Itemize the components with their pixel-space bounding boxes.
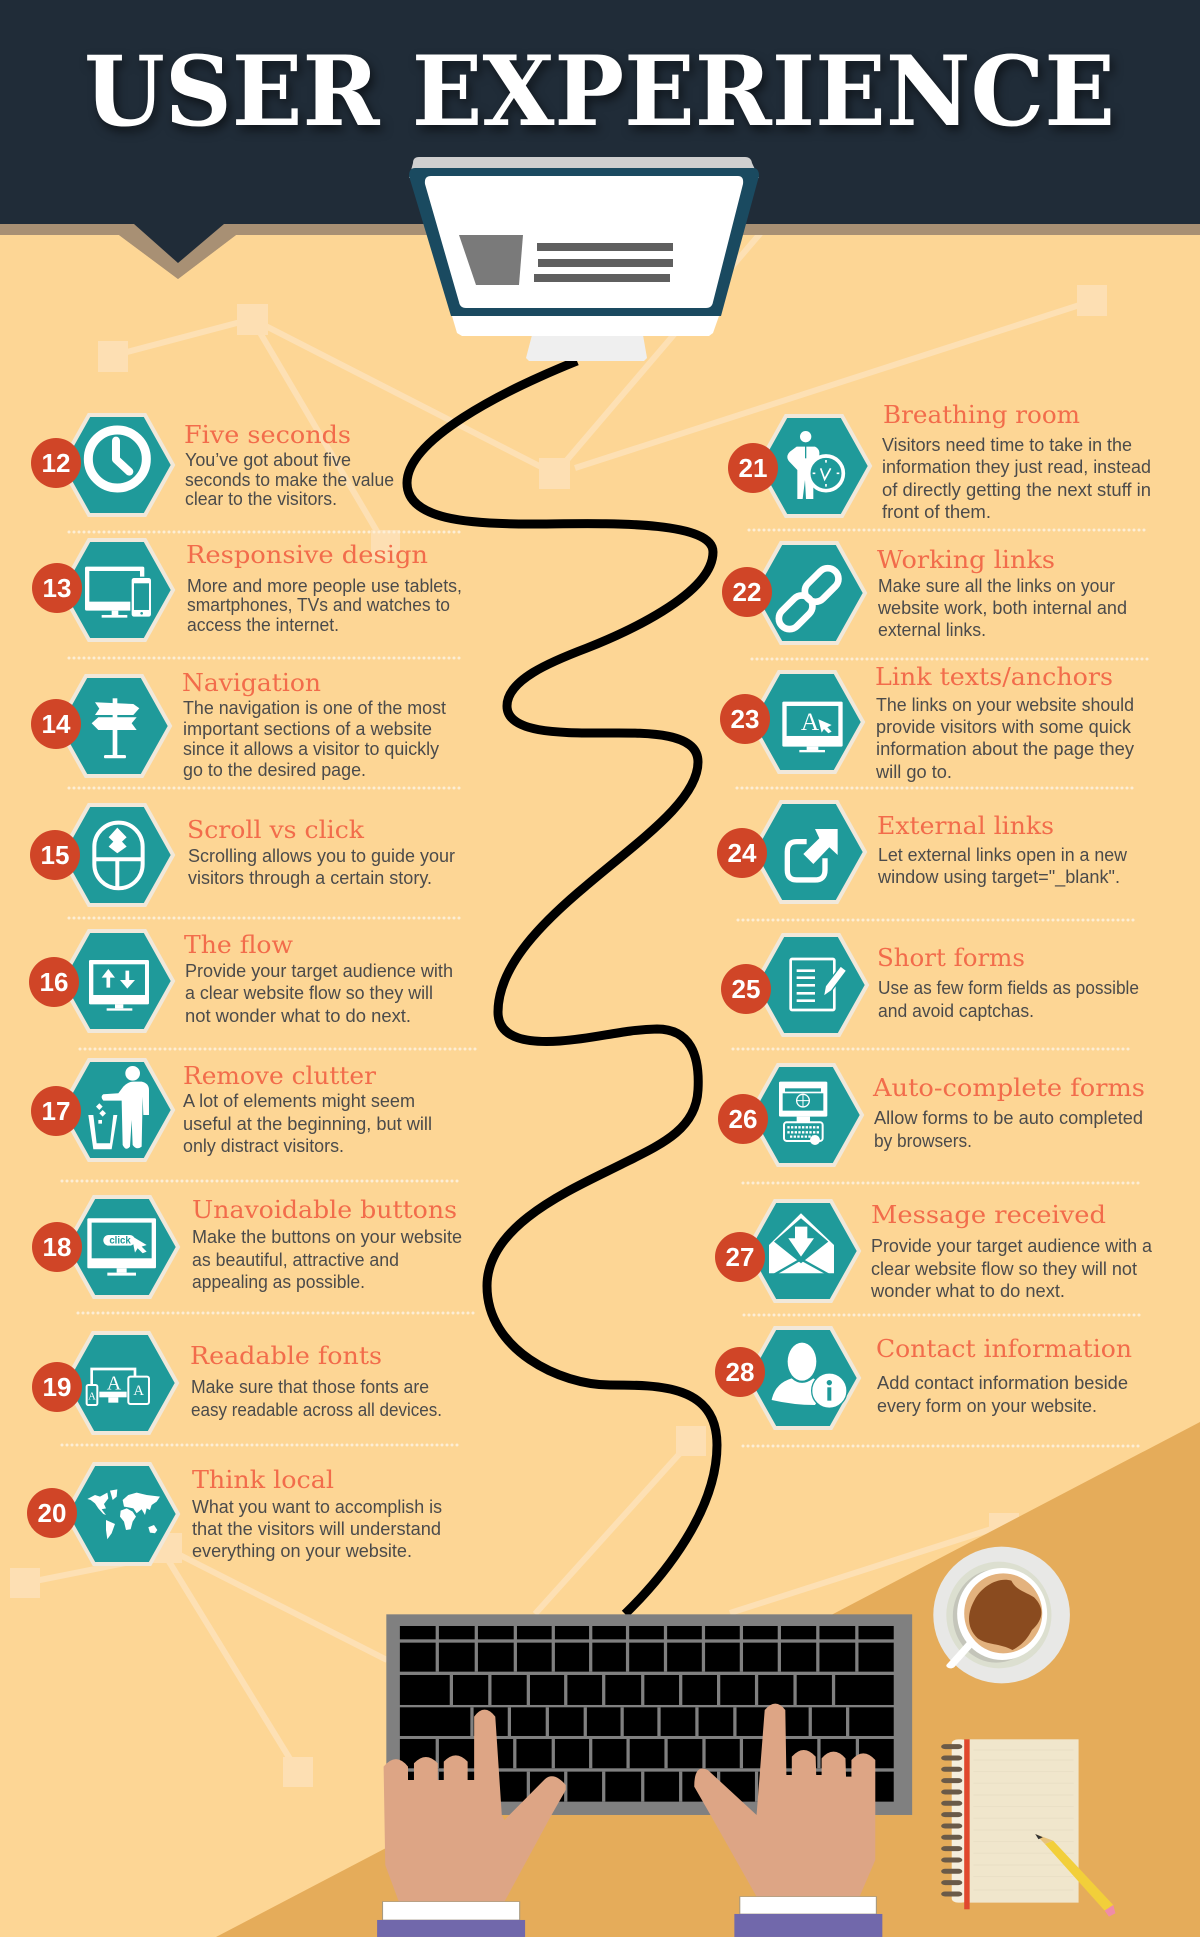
item 27: message received — [715, 1201, 1153, 1301]
icon: person with info badge — [772, 1343, 847, 1408]
item 18: unavoidable buttons: 18 — [43, 1232, 71, 1262]
item 28: contact information: 28 — [726, 1357, 754, 1387]
text: think local: that the visitors will understand — [192, 1519, 441, 1539]
item 20: think local — [27, 1464, 442, 1564]
text: scroll vs click: Scrolling allows you to guide your — [188, 846, 455, 866]
text: auto-complete forms: Allow forms to be auto completed — [874, 1108, 1143, 1128]
text: working links — [877, 576, 1127, 640]
heading: five seconds: Five seconds — [184, 421, 351, 449]
text: breathing room — [882, 435, 1151, 522]
text: responsive design: smartphones, TVs and watches to — [187, 595, 450, 615]
text: breathing room: of directly getting the next stuff in — [882, 480, 1151, 500]
text: external links: Let external links open in a new — [878, 845, 1128, 865]
item 15: scroll vs click: 15 — [41, 840, 69, 870]
network pattern — [10, 222, 1107, 1787]
text: readable fonts — [191, 1377, 442, 1420]
heading: scroll vs click: Scroll vs click — [187, 816, 364, 844]
keyboard — [386, 1614, 912, 1815]
icon: devices with letters: A — [88, 1391, 96, 1402]
text: navigation: go to the desired page. — [183, 760, 366, 780]
text: responsive design: More and more people use tablets, — [187, 576, 462, 596]
dividers — [62, 530, 1148, 1446]
text: remove clutter: only distract visitors. — [183, 1136, 344, 1156]
header banner — [0, 0, 1200, 279]
desk surface — [216, 1422, 1200, 1937]
heading: link texts/anchors: Link texts/anchors — [875, 663, 1113, 691]
icon: man with clock — [787, 431, 843, 499]
text: five seconds: You’ve got about five — [185, 450, 351, 470]
text: remove clutter: useful at the beginning, but will — [183, 1114, 432, 1134]
text: remove clutter — [183, 1091, 432, 1156]
text: unavoidable buttons: Make the buttons on your website — [192, 1227, 462, 1247]
item 19: readable fonts — [32, 1333, 442, 1433]
text: breathing room: front of them. — [882, 502, 991, 522]
text: the flow: not wonder what to do next. — [185, 1006, 411, 1026]
text: link texts/anchors: The links on your website should — [876, 695, 1134, 715]
text: responsive design: access the internet. — [187, 615, 339, 635]
icon: external link arrow — [787, 829, 838, 880]
heading: external links: External links — [877, 812, 1054, 840]
item 25: short forms: 25 — [732, 974, 760, 1004]
text: contact information: every form on your website. — [877, 1396, 1097, 1416]
item 28: contact information — [715, 1328, 1132, 1428]
text: link texts/anchors: provide visitors with some quick — [876, 717, 1132, 737]
item 16: the flow: 16 — [40, 967, 68, 997]
heading: unavoidable buttons: Unavoidable buttons — [192, 1196, 457, 1224]
heading: navigation: Navigation — [182, 669, 321, 697]
title: USER EXPERIENCE — [84, 35, 1115, 148]
icon: world map — [87, 1489, 160, 1539]
icon: envelope — [769, 1213, 834, 1277]
icon: browser and keyboard — [779, 1082, 827, 1145]
item 18: unavoidable buttons — [32, 1196, 462, 1297]
text: auto-complete forms — [874, 1108, 1143, 1151]
heading: auto-complete forms: Auto-complete forms — [872, 1074, 1145, 1102]
item 23: link texts/anchors: 23 — [731, 704, 759, 734]
text: short forms: and avoid captchas. — [878, 1001, 1034, 1021]
text: short forms — [878, 978, 1139, 1021]
item 17: remove clutter: 17 — [42, 1096, 70, 1126]
text: message received: wonder what to do next. — [870, 1281, 1065, 1301]
text: readable fonts: easy readable across all devices. — [191, 1400, 442, 1420]
heading: contact information: Contact information — [876, 1335, 1132, 1363]
icon: monitor with click button: click — [109, 1235, 131, 1246]
icon: mouse — [94, 823, 143, 888]
heading: working links: Working links — [877, 546, 1055, 574]
heading: the flow: The flow — [184, 931, 293, 959]
icon: person at trash can — [88, 1066, 149, 1149]
text: scroll vs click: visitors through a certain story. — [188, 868, 432, 888]
icon: chain link — [774, 564, 843, 634]
text: think local — [192, 1497, 442, 1561]
text: the flow — [185, 961, 453, 1026]
text: link texts/anchors: information about the page they — [876, 739, 1134, 759]
icon: devices with letters — [87, 1369, 149, 1405]
heading: readable fonts: Readable fonts — [190, 1342, 382, 1370]
cable — [407, 361, 717, 1614]
item 13: responsive design — [32, 540, 462, 640]
icon: desktop monitor — [409, 157, 759, 361]
item 26: auto-complete forms: 26 — [729, 1104, 757, 1134]
icon: devices — [85, 567, 152, 618]
text: navigation — [183, 698, 446, 780]
text: navigation: important sections of a website — [183, 719, 432, 739]
text: think local: What you want to accomplish is — [192, 1497, 442, 1517]
icon: monitor with click button — [87, 1218, 156, 1276]
icon: monitor with arrows — [89, 960, 149, 1011]
item 22: working links: 22 — [733, 577, 761, 607]
heading: responsive design: Responsive design — [186, 541, 428, 569]
item 12: five seconds — [31, 415, 394, 515]
text: short forms: Use as few form fields as possible — [878, 978, 1139, 998]
item 13: responsive design: 13 — [43, 573, 71, 603]
text: navigation: since it allows a visitor to quickly — [183, 739, 439, 759]
item 20: think local: 20 — [38, 1498, 66, 1528]
text: five seconds — [185, 450, 394, 509]
text: message received: clear website flow so they will not — [871, 1259, 1137, 1279]
text: working links: Make sure all the links on your — [878, 576, 1115, 596]
text: auto-complete forms: by browsers. — [874, 1131, 972, 1151]
heading: remove clutter: Remove clutter — [183, 1062, 377, 1090]
text: the flow: Provide your target audience with — [185, 961, 453, 981]
item 24: external links: 24 — [728, 838, 757, 868]
item 16: the flow — [29, 931, 453, 1031]
text: five seconds: seconds to make the value — [185, 470, 394, 490]
text: responsive design — [187, 576, 462, 635]
item 15: scroll vs click — [30, 805, 455, 905]
text: breathing room: Visitors need time to take in the — [882, 435, 1132, 455]
text: working links: website work, both internal and — [877, 598, 1127, 618]
item 17: remove clutter — [31, 1060, 432, 1160]
text: external links: window using target="_blank". — [877, 867, 1120, 888]
icon: devices with letters: A — [107, 1372, 122, 1394]
text: external links — [877, 845, 1128, 888]
item 14: navigation — [31, 669, 446, 780]
text: the flow: a clear website flow so they will — [185, 983, 433, 1003]
text: contact information — [877, 1373, 1128, 1416]
text: five seconds: clear to the visitors. — [185, 489, 337, 509]
text: scroll vs click — [188, 846, 455, 888]
text: message received — [870, 1236, 1153, 1301]
item 19: readable fonts: 19 — [43, 1372, 71, 1402]
item 21: breathing room — [728, 401, 1151, 522]
item 12: five seconds: 12 — [42, 448, 70, 478]
icon: devices with letters: A — [133, 1383, 144, 1399]
item 26: auto-complete forms — [718, 1065, 1145, 1165]
text: link texts/anchors: will go to. — [875, 762, 952, 782]
text: link texts/anchors — [875, 695, 1134, 782]
heading: think local: Think local — [192, 1466, 334, 1494]
icon: monitor with letter: A — [801, 708, 820, 736]
icon: form and pencil — [791, 959, 847, 1010]
hands — [377, 1704, 882, 1937]
item 14: navigation: 14 — [42, 709, 71, 739]
icon: monitor with letter — [782, 702, 843, 752]
notebook — [945, 1739, 1079, 1909]
text: unavoidable buttons: appealing as possible. — [192, 1272, 365, 1292]
item 25: short forms — [721, 935, 1139, 1035]
heading: message received: Message received — [871, 1201, 1106, 1229]
pencil — [1035, 1834, 1115, 1917]
text: breathing room: information they just read, instead — [882, 457, 1151, 477]
item 24: external links — [717, 802, 1128, 902]
text: unavoidable buttons: as beautiful, attractive and — [192, 1250, 399, 1270]
text: contact information: Add contact information beside — [877, 1373, 1128, 1393]
heading: breathing room: Breathing room — [883, 401, 1080, 429]
text: working links: external links. — [878, 620, 986, 640]
item 27: message received: 27 — [726, 1242, 754, 1272]
text: think local: everything on your website. — [192, 1541, 412, 1561]
heading: short forms: Short forms — [877, 944, 1025, 972]
text: readable fonts: Make sure that those fonts are — [191, 1377, 429, 1397]
icon: clock — [88, 430, 146, 488]
item 23: link texts/anchors — [720, 663, 1134, 782]
item 22: working links — [722, 543, 1127, 643]
icon: signpost — [92, 698, 139, 758]
coffee cup — [933, 1547, 1070, 1683]
text: remove clutter: A lot of elements might seem — [183, 1091, 415, 1111]
text: navigation: The navigation is one of the most — [183, 698, 446, 718]
text: unavoidable buttons — [192, 1227, 462, 1292]
text: message received: Provide your target audience with a — [871, 1236, 1153, 1256]
item 21: breathing room: 21 — [739, 453, 767, 483]
